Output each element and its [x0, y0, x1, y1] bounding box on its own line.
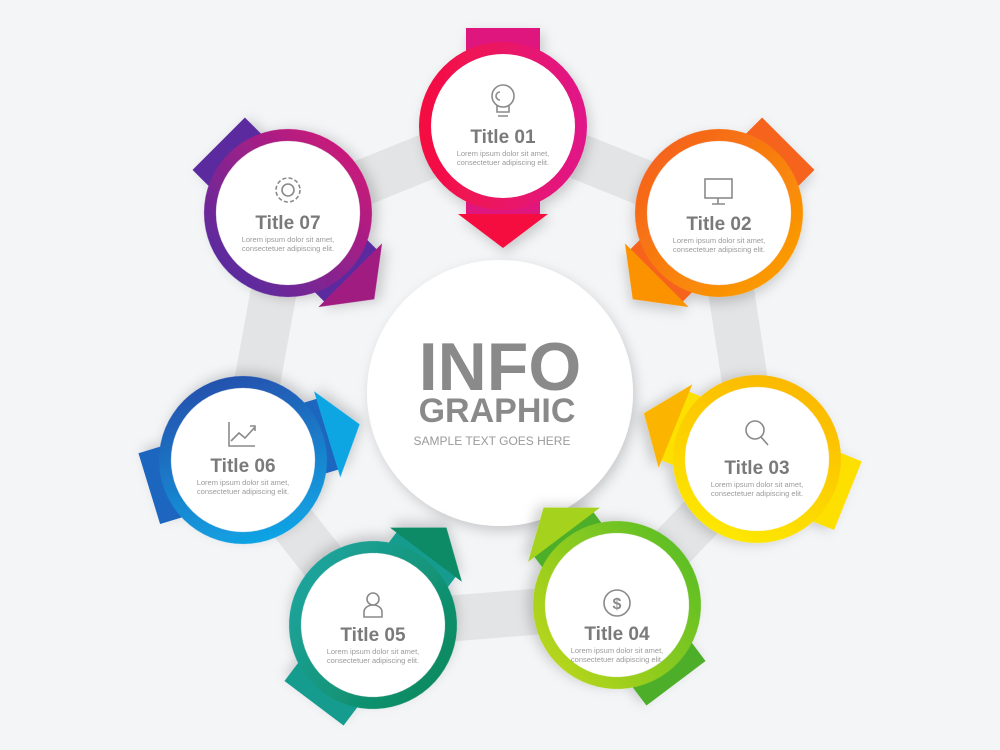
step 07: [159, 84, 434, 359]
step 03: Lorem ipsum dolor sit amet,: [711, 480, 803, 489]
step 06: [125, 344, 384, 569]
center circle: SAMPLE TEXT GOES HERE: [414, 434, 570, 448]
icon: dollar: $: [613, 596, 622, 613]
icon: bulb: [492, 85, 514, 116]
step 06: Lorem ipsum dolor sit amet,: [197, 478, 289, 487]
step 03: consectetuer adipiscing elit.: [711, 489, 803, 498]
center circle: GRAPHIC: [419, 392, 575, 430]
step 01: [419, 28, 587, 248]
step 01: consectetuer adipiscing elit.: [457, 158, 549, 167]
icon: gear: [276, 178, 300, 202]
icon: dollar: [604, 590, 630, 616]
step 06: Title 06: [210, 456, 276, 477]
step 02: [573, 84, 848, 359]
step 07: Lorem ipsum dolor sit amet,: [242, 235, 334, 244]
step 07: Title 07: [255, 213, 321, 234]
step 04: Title 04: [584, 624, 650, 645]
step 06: consectetuer adipiscing elit.: [197, 487, 289, 496]
step 03: Title 03: [724, 458, 790, 479]
center circle: [367, 260, 633, 526]
step 02: Lorem ipsum dolor sit amet,: [673, 236, 765, 245]
step 02: Title 02: [686, 214, 752, 235]
icon: search: [746, 421, 768, 445]
icon: monitor: [705, 179, 732, 204]
step 02: consectetuer adipiscing elit.: [673, 245, 765, 254]
step 05: [247, 477, 514, 750]
step 04: [476, 457, 743, 734]
step 04: consectetuer adipiscing elit.: [571, 655, 663, 664]
step 01: Lorem ipsum dolor sit amet,: [457, 149, 549, 158]
step 05: Title 05: [340, 625, 406, 646]
step 05: Lorem ipsum dolor sit amet,: [327, 647, 419, 656]
connecting heptagon band: [243, 126, 757, 625]
step 03: [612, 335, 879, 574]
icon: person: [364, 593, 382, 617]
step 07: consectetuer adipiscing elit.: [242, 244, 334, 253]
step 05: consectetuer adipiscing elit.: [327, 656, 419, 665]
icon: chart: [229, 422, 255, 446]
center circle: INFO: [419, 329, 581, 405]
step 04: Lorem ipsum dolor sit amet,: [571, 646, 663, 655]
step 01: Title 01: [470, 127, 536, 148]
